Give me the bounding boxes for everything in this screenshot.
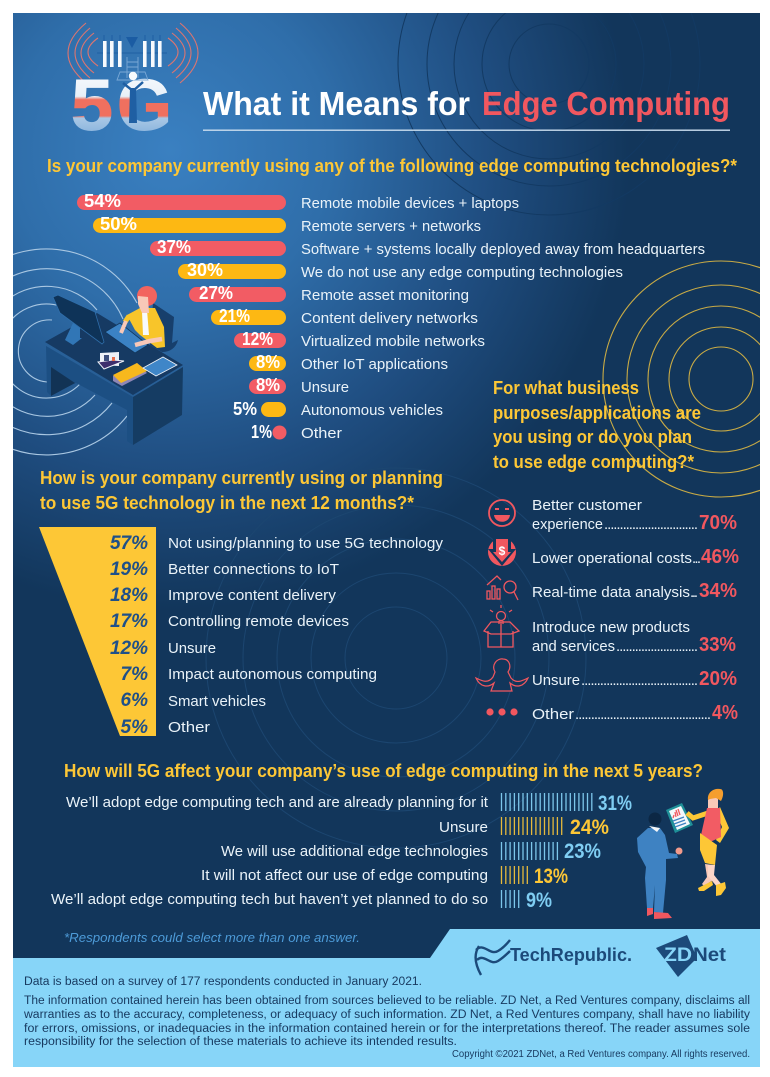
funnel values: 12%	[110, 638, 148, 659]
text: copyright: Copyright ©2021 ZDNet, a Red Ventures company. All rights reserved.	[452, 1049, 750, 1060]
bar 21%: 21%	[219, 306, 250, 326]
item: other: ...........................................	[575, 706, 711, 723]
title rule	[203, 130, 730, 131]
bar 1%: Other	[301, 425, 342, 442]
woman	[687, 789, 729, 896]
funnel shape	[39, 527, 156, 736]
bar chart: edge technologies	[77, 191, 705, 442]
decorative rings: yellow right	[603, 261, 770, 497]
text: disclaimer: responsibility for the selection of these materials to achieve its intended results.	[24, 1036, 457, 1048]
heading: question 4: How will 5G affect your company’s use of edge computing in the next 5 years?	[64, 761, 703, 781]
funnel values: 19%	[110, 559, 148, 580]
item: operational costs: 46%	[701, 546, 739, 568]
item: new products: ..........................	[616, 638, 698, 655]
5G letters: 5	[71, 66, 113, 146]
person	[121, 286, 165, 348]
bar 12%	[234, 329, 485, 350]
funnel values: 6%	[121, 690, 148, 711]
bar 8% red: Unsure	[301, 379, 349, 396]
row 23%: 23%	[564, 840, 601, 863]
item: customer experience	[532, 497, 737, 534]
logo: ZDNet: Net	[693, 945, 727, 966]
row 31%: 31%	[598, 792, 632, 815]
item: data analysis: ...	[690, 584, 698, 601]
desk front panel	[46, 346, 133, 445]
row 24%	[439, 816, 609, 839]
list: business purposes	[476, 497, 739, 724]
funnel labels: Improve content delivery	[168, 587, 337, 604]
bar 50%	[93, 214, 481, 235]
funnel values: 17%	[110, 611, 148, 632]
item: other: Other	[532, 706, 574, 723]
bar 50%: Remote servers + networks	[301, 218, 481, 235]
logo: ZDNet: ZD	[664, 945, 692, 966]
desk top	[45, 313, 183, 395]
funnel values: 57%	[110, 533, 148, 554]
tick chart: 5G effect	[51, 792, 632, 912]
monitor stand	[65, 323, 82, 345]
item: new products: 33%	[699, 634, 736, 656]
bar 27%	[189, 283, 469, 304]
monitor	[53, 295, 104, 344]
bar 30%: We do not use any edge computing technologies	[301, 264, 623, 281]
funnel labels: Not using/planning to use 5G technology	[168, 535, 444, 552]
item: unsure	[532, 668, 737, 690]
yellow book	[113, 363, 147, 386]
chair	[150, 303, 178, 352]
logo: TechRepublic	[476, 940, 632, 975]
icon: lower costs: $	[499, 544, 506, 558]
5G letters	[71, 66, 172, 146]
decorative rings: white left	[0, 249, 137, 455]
funnel values: 5%	[121, 717, 148, 738]
row 13%: 13%	[534, 865, 568, 888]
item: customer experience: experience	[532, 516, 603, 533]
title: What it Means for	[203, 86, 470, 123]
heading: question 3: For what business	[493, 378, 639, 398]
heading: question 2: How is your company currently using or planning	[40, 468, 443, 488]
row 31%: We’ll adopt edge computing tech and are already planning for it	[66, 794, 489, 811]
icon: box with light bulb	[484, 605, 519, 647]
item: data analysis: Real-time data analysis	[532, 584, 690, 601]
text: disclaimer: warranties as to the accuracy, completeness, or adequacy of such information. ZD Net, a Red Ventures company, shall have no liability	[23, 1009, 750, 1021]
bar 27%: Remote asset monitoring	[301, 287, 469, 304]
bar 8% yellow	[249, 352, 448, 373]
heading: question 3: you using or do you plan	[493, 427, 692, 447]
text: disclaimer: for errors, omissions, or inadequacies in the information contained herein or for the interpretations thereof. The reader assumes sole	[24, 1023, 750, 1035]
funnel labels: Unsure	[168, 640, 216, 657]
bar 5%	[233, 399, 443, 419]
bar 30%	[178, 260, 623, 281]
bar 54%: 54%	[84, 191, 121, 211]
blue book	[143, 357, 177, 376]
bar 54%	[77, 191, 519, 212]
panel: footer	[13, 929, 760, 1067]
row 9%: 9%	[526, 889, 552, 912]
icon: shrugging person	[476, 659, 528, 691]
bar 12%: Virtualized mobile networks	[301, 333, 485, 350]
title: Edge Computing	[482, 86, 730, 123]
bar 30%: 30%	[187, 260, 223, 280]
title	[203, 86, 730, 123]
illustration: person at desk	[45, 286, 183, 445]
heading: question 3	[493, 378, 701, 472]
footnote: *Respondents could select more than one answer.	[64, 931, 360, 945]
antenna panels	[97, 35, 167, 67]
logo: ZDNet	[656, 935, 727, 977]
item: customer experience: ..............................	[604, 516, 698, 533]
row 13%: It will not affect our use of edge computing	[201, 867, 488, 884]
bar 8% yellow: 8%	[256, 352, 280, 372]
bar 1%	[251, 422, 342, 442]
bar 21%	[211, 306, 478, 327]
bar 8% red: 8%	[256, 375, 280, 395]
funnel values	[110, 533, 148, 738]
row 23%	[221, 840, 601, 863]
item: operational costs: ...	[692, 550, 701, 567]
funnel labels: Better connections to IoT	[168, 561, 339, 578]
item: other	[532, 702, 738, 724]
row 13%	[201, 865, 568, 888]
item: data analysis: 34%	[699, 580, 737, 602]
heading: question 2	[40, 468, 443, 513]
radio waves	[68, 23, 198, 83]
row 9%: We’ll adopt edge computing tech but haven’t yet planned to do so	[51, 891, 488, 908]
bar 8% red	[249, 375, 349, 396]
funnel values: 7%	[121, 664, 148, 685]
bar 54%: Remote mobile devices + laptops	[301, 195, 519, 212]
tower	[117, 37, 148, 123]
item: operational costs: Lower operational costs	[532, 550, 692, 567]
item: new products: Introduce new products	[532, 619, 690, 636]
item: customer experience: Better customer	[532, 497, 642, 514]
funnel labels	[168, 535, 444, 736]
man	[637, 812, 682, 919]
row 9%	[51, 889, 552, 912]
item: unsure: .....................................	[581, 672, 698, 689]
heading: question 2: to use 5G technology in the next 12 months?*	[40, 493, 414, 513]
logo: TechRepublic: TechRepublic.	[510, 945, 632, 965]
item: operational costs	[532, 546, 739, 568]
5G letters: G	[117, 66, 172, 146]
funnel labels: Other	[168, 719, 210, 736]
funnel chart: 5G use	[39, 527, 444, 738]
funnel labels: Impact autonomous computing	[168, 666, 377, 683]
row 24%: 24%	[570, 816, 609, 839]
item: unsure: Unsure	[532, 672, 580, 689]
keyboard	[105, 323, 148, 353]
text: survey note: Data is based on a survey of 177 respondents conducted in January 2021.	[24, 976, 422, 988]
item: other: 4%	[712, 702, 738, 724]
item: unsure: 20%	[699, 668, 737, 690]
bar 5%: Autonomous vehicles	[301, 402, 443, 419]
bar 21%: Content delivery networks	[301, 310, 478, 327]
funnel labels: Controlling remote devices	[168, 613, 349, 630]
row 23%: We will use additional edge technologies	[221, 843, 488, 860]
bar 5%: 5%	[233, 399, 257, 419]
row 31%	[66, 792, 632, 815]
bar 37%: 37%	[157, 237, 191, 257]
item: new products	[532, 619, 736, 656]
bar 50%: 50%	[100, 214, 137, 234]
desk side leg	[133, 367, 183, 445]
decorative rings: top right	[398, 13, 572, 216]
heading: question 3: to use edge computing?*	[493, 452, 694, 472]
text: disclaimer: The information contained herein has been obtained from sources believed to be reliable. ZD Net, a Red Ventures company, disclaims all	[24, 995, 750, 1007]
item: customer experience: 70%	[699, 512, 737, 534]
bar 37%	[150, 237, 705, 258]
funnel labels: Smart vehicles	[168, 693, 266, 710]
desk opening	[51, 367, 75, 396]
icon: lower costs	[488, 537, 516, 566]
bar 12%: 12%	[242, 329, 273, 349]
illustration: two colleagues	[637, 789, 729, 919]
row 24%: Unsure	[439, 819, 488, 836]
icon: three dots	[486, 708, 518, 716]
icon: data analysis	[487, 576, 518, 600]
item: new products: and services	[532, 638, 615, 655]
bar 1%: 1%	[251, 422, 272, 442]
bar 8% yellow: Other IoT applications	[301, 356, 448, 373]
icon: 5G tower logo	[68, 23, 198, 146]
bar 37%: Software + systems locally deployed away from headquarters	[301, 241, 705, 258]
text: disclaimer	[23, 995, 750, 1048]
decorative rings: centre dark	[206, 468, 586, 848]
icon: smiley	[489, 500, 515, 526]
bar 27%: 27%	[199, 283, 233, 303]
item: data analysis	[532, 580, 737, 602]
funnel values: 18%	[110, 585, 148, 606]
tablet	[666, 803, 693, 833]
heading: question 1: Is your company currently using any of the following edge computing technologies?*	[47, 156, 737, 176]
heading: question 3: purposes/applications are	[493, 403, 701, 423]
papers	[98, 352, 124, 369]
